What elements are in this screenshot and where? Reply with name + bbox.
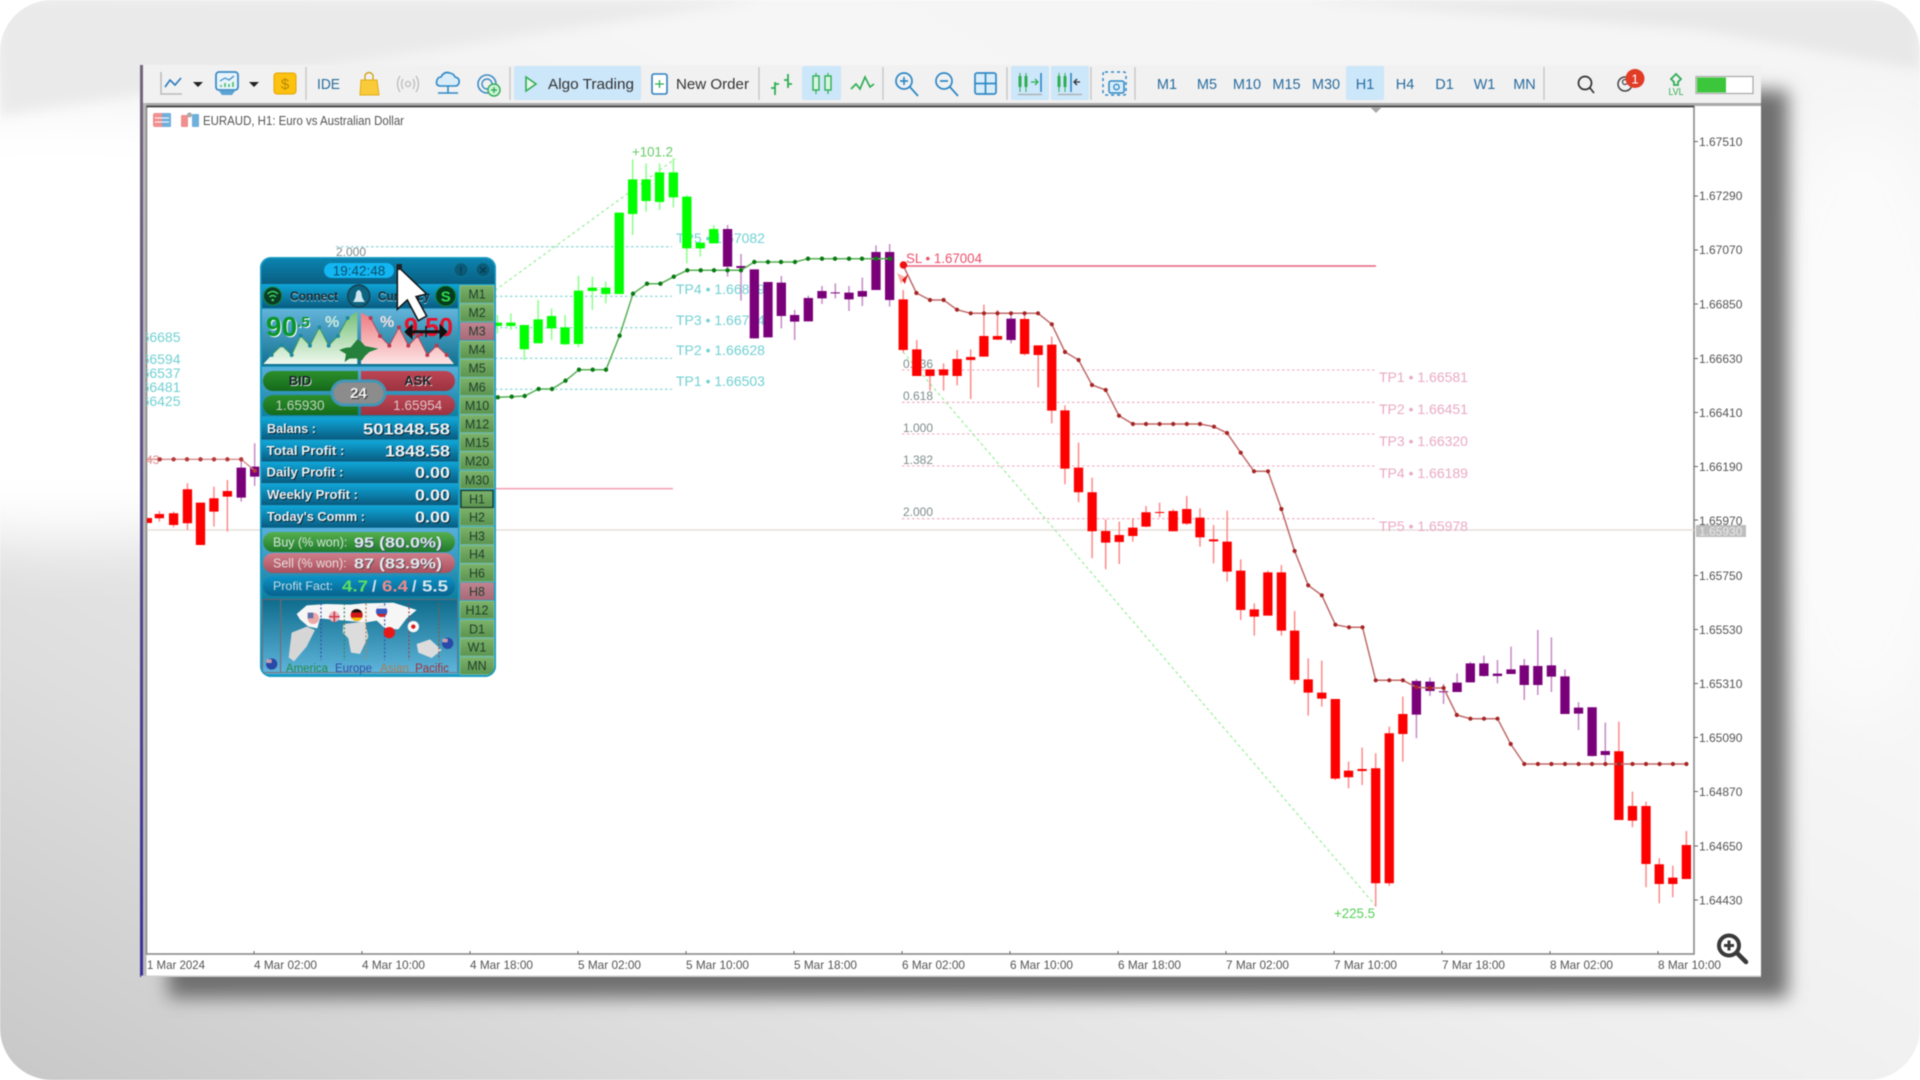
timeframe column: D1 xyxy=(469,622,485,636)
level gauge xyxy=(1696,76,1753,94)
timeframe column: M30 xyxy=(465,474,489,488)
timeframe column: H4 xyxy=(469,548,485,562)
long-trade levels and labels: TP1 • 1.66503 xyxy=(676,373,765,389)
timeframe column xyxy=(458,284,496,677)
resize cursor xyxy=(405,325,447,338)
candles: left section xyxy=(159,158,728,545)
icon: wifi xyxy=(264,287,282,305)
long-trade levels and labels: 66685 xyxy=(142,329,181,345)
price axis: 1.66410 xyxy=(1699,406,1743,420)
icon: grid xyxy=(975,73,996,94)
time axis: 6 Mar 02:00 xyxy=(902,958,965,972)
price axis: 1.65090 xyxy=(1699,731,1743,745)
icon: LVL: LVL xyxy=(1668,87,1684,98)
close button: × xyxy=(479,262,487,278)
candles: right section xyxy=(1200,508,1686,907)
icon: shopping bag xyxy=(360,72,379,95)
timeframe column: H6 xyxy=(469,566,485,580)
icon: chart monitor xyxy=(216,72,238,95)
short-trade levels and labels: 2.000 xyxy=(903,505,933,519)
profit label: +101.2: +101.2 xyxy=(632,144,673,160)
bid / ask section xyxy=(262,367,458,416)
timeframe column: M4 xyxy=(468,343,486,357)
row: balance xyxy=(261,418,458,440)
icon: screenshot camera xyxy=(1103,72,1126,95)
platform window xyxy=(140,65,1761,977)
spread badge xyxy=(332,381,385,405)
profit factor pill: 6.4 xyxy=(382,578,408,596)
timeframe buttons xyxy=(1157,77,1536,93)
toolbar xyxy=(161,66,1753,100)
red trailing stop line xyxy=(903,265,1686,764)
sell pill xyxy=(263,553,455,573)
timeframe buttons: M5 xyxy=(1197,77,1217,93)
icon: currency: S xyxy=(441,288,451,306)
price axis: 1.67510 xyxy=(1699,135,1743,149)
world sessions map: Pacific xyxy=(415,663,449,675)
icon: notifications with badge: 1 xyxy=(1631,72,1639,86)
Algo Trading button xyxy=(514,66,641,100)
short-trade levels and labels: TP1 • 1.66581 xyxy=(1379,369,1468,385)
price axis xyxy=(1694,135,1743,908)
world sessions map: America xyxy=(286,663,329,675)
active H1 button xyxy=(1346,66,1384,100)
timeframe column: M15 xyxy=(465,436,489,450)
icon: currency xyxy=(436,286,456,306)
short-trade levels and labels xyxy=(902,357,1468,534)
long-trade levels and labels: 66594 xyxy=(142,351,181,367)
time axis: 7 Mar 18:00 xyxy=(1442,958,1505,972)
bid / ask section: 1.65954 xyxy=(393,398,443,413)
icon: search xyxy=(1578,76,1594,93)
timeframe column: W1 xyxy=(468,640,486,654)
flag: Japan xyxy=(408,621,419,632)
long-trade levels and labels: TP2 • 1.66628 xyxy=(676,342,765,358)
row: balance: Balans : xyxy=(267,422,316,436)
time axis: 5 Mar 02:00 xyxy=(578,958,641,972)
info button xyxy=(454,263,468,278)
flag: Germany xyxy=(351,609,363,621)
stop-loss line: SL • 1.67004 xyxy=(906,250,982,266)
long-trade levels and labels: TP5 • 1.67082 xyxy=(676,230,765,246)
row: weekly profit xyxy=(261,484,458,505)
profit factor pill xyxy=(263,576,455,596)
time axis: 1 Mar 2024 xyxy=(147,958,205,972)
Algo Trading button: Algo Trading xyxy=(548,76,634,93)
long-trade levels and labels: 66537 xyxy=(142,365,181,381)
connection row: Currency xyxy=(378,290,430,304)
time axis: 4 Mar 10:00 xyxy=(362,958,425,972)
price axis: 1.64870 xyxy=(1699,785,1743,799)
time axis: 6 Mar 18:00 xyxy=(1118,958,1181,972)
row: today's commission: 0.00 xyxy=(415,510,450,526)
long-trade levels and labels: 43 xyxy=(146,453,160,467)
profit diagonals xyxy=(490,159,1375,905)
profit factor pill: Profit Fact: xyxy=(273,579,333,593)
mouse pointer xyxy=(397,264,427,321)
world sessions map: Europe xyxy=(335,663,372,675)
icon: zoom out xyxy=(936,73,958,96)
timeframe buttons: H1 xyxy=(1356,77,1374,93)
icon: line chart mode xyxy=(851,77,874,89)
IDE button: IDE xyxy=(317,77,340,93)
timeframe buttons: M15 xyxy=(1272,77,1301,93)
bid / ask section: BID xyxy=(289,373,311,388)
chart shift marker xyxy=(1370,107,1382,113)
profit label: +225.5: +225.5 xyxy=(1334,905,1375,921)
short-trade levels and labels: 0.236 xyxy=(903,357,933,371)
icon: signal xyxy=(398,76,418,92)
New Order button: New Order xyxy=(676,76,749,93)
row: daily profit: Daily Profit : xyxy=(266,466,344,480)
price axis: 1.65970 xyxy=(1699,514,1743,528)
buy pill: 95 (80.0%) xyxy=(354,534,442,552)
row: weekly profit: Weekly Profit : xyxy=(267,488,358,502)
buy pill xyxy=(263,532,455,552)
profit factor pill: 4.7 xyxy=(342,578,368,596)
icon: LVL xyxy=(1668,74,1684,98)
long-trade levels and labels: TP4 • 1.66879 xyxy=(676,281,765,297)
time axis: 7 Mar 10:00 xyxy=(1334,958,1397,972)
timeframe column: MN xyxy=(467,659,487,673)
short-trade levels and labels: TP2 • 1.66451 xyxy=(1379,401,1468,417)
time axis: 8 Mar 02:00 xyxy=(1550,958,1613,972)
icon: dropdown arrow xyxy=(249,82,259,87)
icon: table xyxy=(153,113,171,127)
sell pill: 87 (83.9%) xyxy=(354,556,442,572)
long-trade levels and labels: TP3 • 1.66754 xyxy=(676,312,765,328)
timeframe column: M1 xyxy=(468,288,486,302)
short-trade levels and labels: TP5 • 1.65978 xyxy=(1379,518,1468,534)
time axis: 6 Mar 10:00 xyxy=(1010,958,1073,972)
time axis: 4 Mar 18:00 xyxy=(470,958,533,972)
timeframe column: M2 xyxy=(468,306,486,320)
clock: 19:42:48 xyxy=(333,264,385,278)
short-trade levels and labels: TP4 • 1.66189 xyxy=(1379,465,1468,481)
timeframe buttons: H4 xyxy=(1396,77,1414,93)
row: weekly profit: 0.00 xyxy=(415,488,450,504)
timeframe column: M10 xyxy=(465,399,489,413)
chart plot xyxy=(142,144,1686,921)
long-trade levels and labels xyxy=(142,230,765,467)
price axis: 1.64430 xyxy=(1699,894,1743,908)
connection row: Connect xyxy=(290,290,339,304)
flag: Australia xyxy=(266,658,277,670)
profit factor pill: / xyxy=(412,578,417,596)
title bar xyxy=(261,258,495,284)
sentiment gauge xyxy=(262,309,458,366)
candle clipped at chart edge xyxy=(147,518,152,523)
row: total profit xyxy=(261,441,458,462)
sentiment gauge: 90 xyxy=(266,311,297,342)
price axis: 1.65310 xyxy=(1699,677,1743,691)
short-trade levels and labels: 1.000 xyxy=(903,421,933,435)
flag: USA xyxy=(308,613,319,624)
price axis: 1.66630 xyxy=(1699,352,1743,366)
chart title xyxy=(153,112,404,128)
timeframe buttons: W1 xyxy=(1474,77,1495,93)
timeframe column: M20 xyxy=(465,454,489,468)
flag: Russia xyxy=(376,606,387,617)
time axis: 5 Mar 10:00 xyxy=(686,958,749,972)
profit factor pill: 5.5 xyxy=(422,578,448,596)
flag: UK xyxy=(329,611,340,622)
long-trade levels and labels: 66481 xyxy=(142,379,181,395)
price axis: 1.66850 xyxy=(1699,298,1743,312)
left stop-loss line xyxy=(490,488,673,490)
toolbar dividers xyxy=(306,67,1544,100)
price axis: 1.67290 xyxy=(1699,189,1743,203)
left red trailing stop line xyxy=(147,459,255,471)
timeframe buttons: MN xyxy=(1513,77,1536,93)
buy pill: Buy (% won): xyxy=(273,536,347,550)
timeframe column: M6 xyxy=(468,380,486,394)
auto scroll button xyxy=(1011,66,1049,100)
time axis: 7 Mar 02:00 xyxy=(1226,958,1289,972)
icon: bar chart mode xyxy=(771,74,792,95)
icon: dollar coin xyxy=(274,73,296,94)
icon: dollar coin: $ xyxy=(281,76,290,93)
timeframe column: M12 xyxy=(465,418,489,432)
New Order button xyxy=(652,74,749,94)
zoom magnifier icon xyxy=(1719,936,1746,962)
spread badge: 24 xyxy=(350,385,367,402)
row: daily profit xyxy=(261,462,458,483)
row: daily profit: 0.00 xyxy=(415,465,450,482)
sell pill: Sell (% won): xyxy=(273,556,347,570)
timeframe column: M3 xyxy=(468,324,486,338)
icon: cloud xyxy=(436,72,459,93)
icon: notifications with badge xyxy=(1618,69,1644,91)
bid / ask section: ASK xyxy=(404,373,432,388)
account rows xyxy=(261,418,458,528)
sentiment gauge: % xyxy=(325,314,339,331)
price axis: 1.66190 xyxy=(1699,460,1743,474)
timeframe column: H8 xyxy=(469,585,485,599)
sentiment gauge: 9.50 xyxy=(404,312,453,342)
icon: dropdown arrow xyxy=(193,82,203,87)
row: total profit: Total Profit : xyxy=(266,444,344,458)
sentiment gauge: % xyxy=(380,314,394,331)
row: today's commission: Today's Comm : xyxy=(267,510,365,524)
short-trade levels and labels: 0.618 xyxy=(903,389,933,403)
close button xyxy=(476,262,490,278)
price axis: 1.65530 xyxy=(1699,623,1743,637)
win rate section xyxy=(262,528,458,599)
icon: bell xyxy=(348,285,370,307)
icon: line chart xyxy=(161,72,182,94)
short entry marker xyxy=(897,261,908,284)
profit factor pill: / xyxy=(372,578,377,596)
price axis: 1.64650 xyxy=(1699,840,1743,854)
time axis xyxy=(147,951,1721,972)
info button: ! xyxy=(459,266,463,278)
panel outline xyxy=(260,258,496,676)
timeframe column: H12 xyxy=(466,604,489,618)
green trailing stop line xyxy=(498,259,890,397)
timeframe column: M5 xyxy=(468,362,486,376)
timeframe buttons: D1 xyxy=(1435,77,1454,93)
timeframe column: H1 xyxy=(469,492,485,506)
timeframe column: H3 xyxy=(469,530,485,544)
flag: New Zealand xyxy=(442,638,453,649)
trading dashboard panel xyxy=(260,257,496,677)
chart title: EURAUD, H1: Euro vs Australian Dollar xyxy=(203,114,404,128)
chart shift button xyxy=(1051,66,1089,100)
time axis: 4 Mar 02:00 xyxy=(254,958,317,972)
timeframe buttons: M1 xyxy=(1157,77,1177,93)
timeframe buttons: M10 xyxy=(1233,77,1261,93)
timeframe buttons: M30 xyxy=(1312,77,1340,93)
sentiment gauge: .5 xyxy=(297,314,310,331)
chart pane frame xyxy=(146,106,1694,954)
short-trade levels and labels: TP3 • 1.66320 xyxy=(1379,433,1468,449)
world sessions map xyxy=(262,599,458,675)
icon: fingerprint xyxy=(478,75,500,96)
time axis: 8 Mar 10:00 xyxy=(1658,958,1721,972)
current price tag: 1.65930 xyxy=(1699,524,1743,538)
price axis: 1.65750 xyxy=(1699,569,1743,583)
timeframe column: H2 xyxy=(469,510,485,524)
connection row xyxy=(262,284,458,308)
icon: candles xyxy=(181,112,199,127)
icon: zoom in xyxy=(896,73,918,96)
row: total profit: 1848.58 xyxy=(385,444,450,460)
long-trade levels and labels: 2.000 xyxy=(336,245,366,259)
row: balance: 501848.58 xyxy=(363,422,450,438)
candles: red decline xyxy=(903,290,1187,569)
candle chart mode button xyxy=(802,66,841,100)
flag: China xyxy=(384,627,395,638)
candles: mid purple section xyxy=(741,244,890,340)
price axis: 1.67070 xyxy=(1699,243,1743,257)
time axis: 5 Mar 18:00 xyxy=(794,958,857,972)
current price line xyxy=(147,529,1694,531)
window drop shadow xyxy=(168,90,1788,998)
long-trade levels and labels: 66425 xyxy=(142,393,181,409)
bid / ask section: 1.65930 xyxy=(276,398,324,413)
short-trade levels and labels: 1.382 xyxy=(903,453,933,467)
world sessions map: Asian xyxy=(380,663,409,675)
row: today's commission xyxy=(261,506,458,528)
